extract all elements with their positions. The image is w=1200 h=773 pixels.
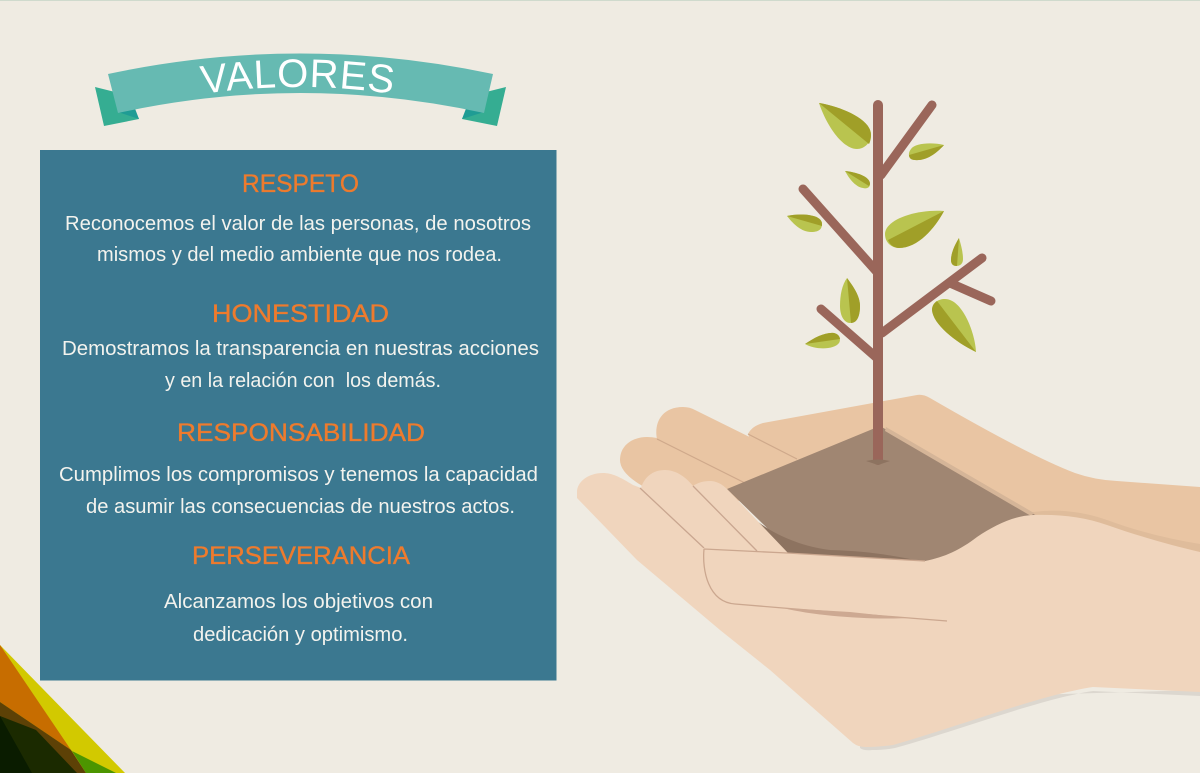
front hand [577,470,1200,747]
panel: values [40,150,556,680]
value: honestidad [62,300,539,392]
value: honestidad: HONESTIDAD [212,300,389,328]
value: perseverancia: Alcanzamos los objetivos con [164,591,433,613]
value: perseverancia [164,542,433,646]
value: respeto [65,170,531,266]
value: perseverancia: dedicación y optimismo. [193,624,408,646]
banner: VALORES ribbon [95,54,506,126]
value: responsabilidad: RESPONSABILIDAD [177,419,425,447]
illustration: hands holding a plant [577,395,1200,750]
plant [787,103,991,465]
heading: VALORES: VALORES [199,59,393,93]
value: responsabilidad: de asumir las consecuencias de nuestros actos. [86,496,515,518]
back hand [620,395,1200,560]
value: honestidad: Demostramos la transparencia en nuestras acciones [62,338,539,360]
value: respeto: RESPETO [242,170,359,198]
value: respeto: Reconocemos el valor de las personas, de nosotros [65,213,531,235]
value: responsabilidad: Cumplimos los compromisos y tenemos la capacidad [59,464,538,486]
value: honestidad: y en la relación con los demás. [165,370,441,392]
hand shadow [860,690,1200,750]
trunk and branches [803,105,991,465]
leaves [787,103,976,352]
value: perseverancia: PERSEVERANCIA [192,542,410,570]
decoration: corner triangles [0,645,125,773]
value: respeto: mismos y del medio ambiente que nos rodea. [97,244,502,266]
soil [727,426,1037,566]
value: responsabilidad [59,419,538,518]
